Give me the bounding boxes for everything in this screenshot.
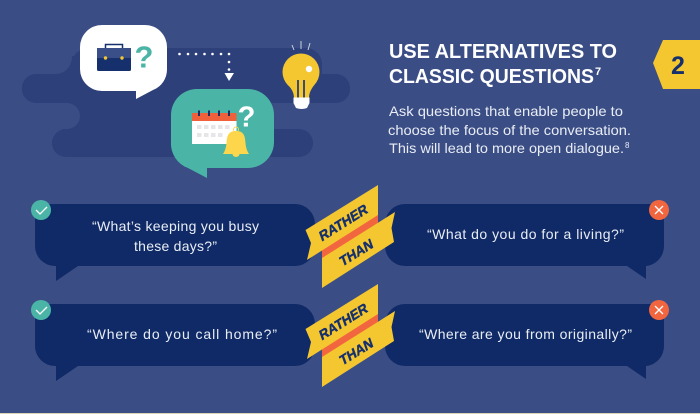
body text — [388, 103, 631, 156]
row 2 left speech bubble — [31, 300, 315, 381]
number tag: 2 — [671, 52, 685, 80]
ribbon: rather than, row 1: THAN — [338, 236, 375, 270]
row 1 left speech bubble: “What’s keeping you busy — [92, 218, 259, 234]
heading: 7 — [595, 66, 601, 78]
ribbon: rather than, row 2: RATHER — [317, 300, 370, 343]
body text: Ask questions that enable people to — [389, 103, 623, 119]
ribbon: rather than, row 1: RATHER — [317, 201, 370, 244]
icon: briefcase — [97, 44, 131, 71]
heading — [389, 41, 617, 88]
icon: check — [31, 200, 51, 220]
row 1 left speech bubble: these days?” — [134, 238, 217, 254]
icon: calendar — [192, 110, 236, 144]
illustration: calendar question bubble — [171, 89, 274, 178]
icon: bell — [223, 127, 249, 157]
heading: USE ALTERNATIVES TO — [389, 41, 617, 63]
row 2 left speech bubble: “Where do you call home?” — [87, 326, 277, 342]
icon: cross — [649, 300, 669, 320]
body text: choose the focus of the conversation. — [388, 122, 631, 138]
question mark: white: ? — [238, 102, 255, 134]
illustration: briefcase question bubble — [80, 25, 167, 99]
dotted arrow — [178, 53, 234, 81]
row 1 left speech bubble — [31, 200, 315, 281]
row 1 right speech bubble — [385, 200, 669, 279]
row 2 right speech bubble — [385, 300, 669, 379]
ribbon: rather than, row 2 — [306, 284, 395, 387]
icon: cross — [649, 200, 669, 220]
row 2 right speech bubble: “Where are you from originally?” — [419, 326, 632, 342]
icon: check — [31, 300, 51, 320]
body text: This will lead to more open dialogue. — [389, 140, 624, 156]
number tag — [653, 40, 700, 89]
body text: 8 — [625, 141, 630, 150]
ribbon: rather than, row 1 — [306, 185, 395, 288]
heading: CLASSIC QUESTIONS — [389, 66, 594, 88]
background clouds — [0, 48, 350, 157]
icon: light bulb — [282, 41, 320, 109]
question mark: teal: ? — [135, 40, 153, 74]
ribbon: rather than, row 2: THAN — [338, 335, 375, 369]
row 1 right speech bubble: “What do you do for a living?” — [427, 226, 624, 242]
